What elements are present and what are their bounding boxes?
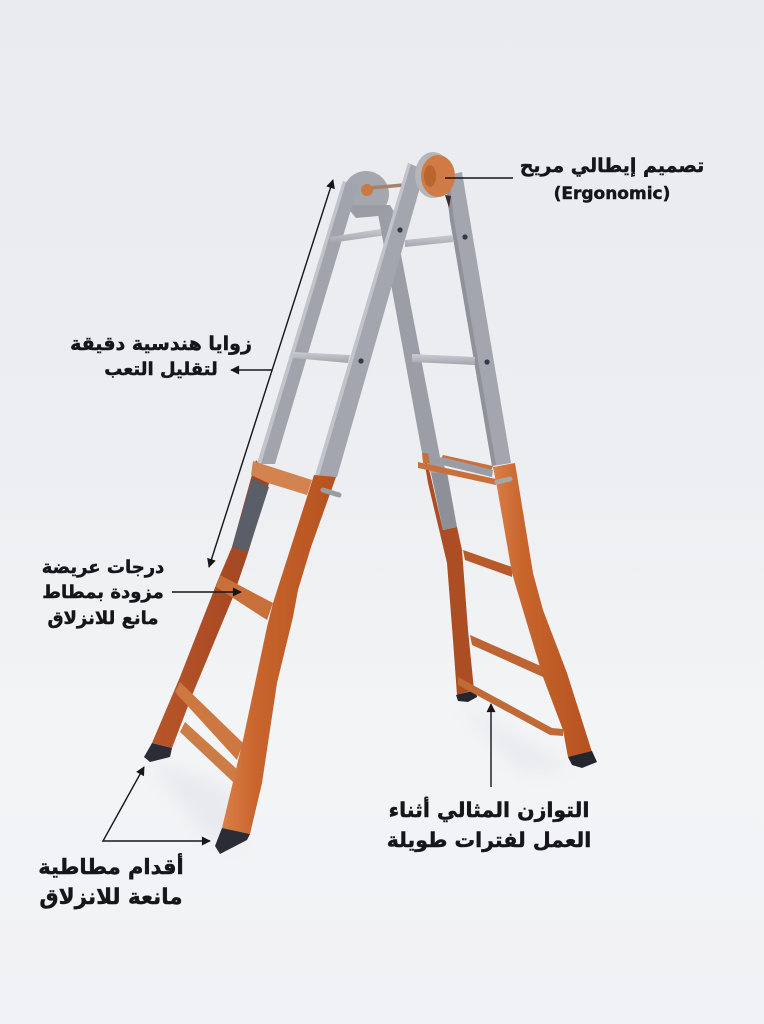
arrow: geometric angles span <box>209 180 333 567</box>
label: geometric angles <box>70 333 252 380</box>
right back grey low section <box>431 472 457 530</box>
left upper rung <box>216 575 273 620</box>
back frame: hinge disc <box>343 171 402 218</box>
front grey rungs <box>405 235 475 365</box>
arrows: rubber feet <box>103 767 210 841</box>
left pin <box>323 490 339 495</box>
back grey rungs <box>293 228 387 363</box>
label: balance <box>387 796 591 852</box>
front main grey rail <box>315 163 425 477</box>
label: ergonomic design: تصميم إيطالي مريح <box>520 155 704 177</box>
front main orange leg <box>222 475 336 834</box>
right back foot <box>456 690 477 702</box>
back left grey rail <box>257 181 358 464</box>
rail bolts <box>358 227 490 365</box>
label: ergonomic design: (Ergonomic) <box>554 184 670 204</box>
right step plate <box>430 457 493 477</box>
callout lines and arrows <box>103 178 513 841</box>
label: geometric angles: زوايا هندسية دقيقة <box>70 333 252 355</box>
right step tab <box>422 453 430 463</box>
front right grey rail <box>445 172 511 466</box>
label: rubber feet: مانعة للانزلاق <box>39 885 183 910</box>
right middle rung <box>470 635 543 677</box>
label: geometric angles: لتقليل التعب <box>104 359 218 380</box>
right back leg <box>423 453 474 695</box>
right lower thin rung <box>458 677 563 736</box>
left lower thin rung <box>180 722 238 782</box>
label: wide steps <box>42 557 164 629</box>
label: balance: العمل لفترات طويلة <box>387 828 591 852</box>
right upper rung <box>463 550 512 577</box>
ladder <box>144 152 597 854</box>
leader: ergonomic knob <box>445 177 513 179</box>
arrow: balance <box>490 704 492 787</box>
right front leg <box>493 463 592 757</box>
floor shadows <box>150 700 570 850</box>
back left orange leg <box>152 460 270 748</box>
arrow: wide steps <box>172 591 241 593</box>
back left foot <box>144 743 172 762</box>
label: rubber feet: أقدام مطاطية <box>38 852 184 879</box>
back dark grey section <box>232 478 269 552</box>
back right grey rail <box>378 208 447 473</box>
label: wide steps: مزودة بمطاط <box>42 582 164 603</box>
front left foot <box>215 828 250 854</box>
label: balance: التوازن المثالي أثناء <box>389 796 589 822</box>
label: ergonomic design <box>520 155 704 204</box>
left orange step <box>251 461 312 495</box>
label: wide steps: درجات عريضة <box>42 557 164 578</box>
arrow: geometric angles label <box>231 369 272 371</box>
right front foot <box>568 751 597 768</box>
label: wide steps: مانع للانزلاق <box>47 608 159 629</box>
ergonomic top knob <box>415 152 455 208</box>
label: rubber feet <box>38 852 184 910</box>
right step back bar <box>441 455 493 471</box>
right step front bar <box>418 462 496 485</box>
right pin <box>497 479 510 482</box>
left middle rung <box>175 682 243 760</box>
